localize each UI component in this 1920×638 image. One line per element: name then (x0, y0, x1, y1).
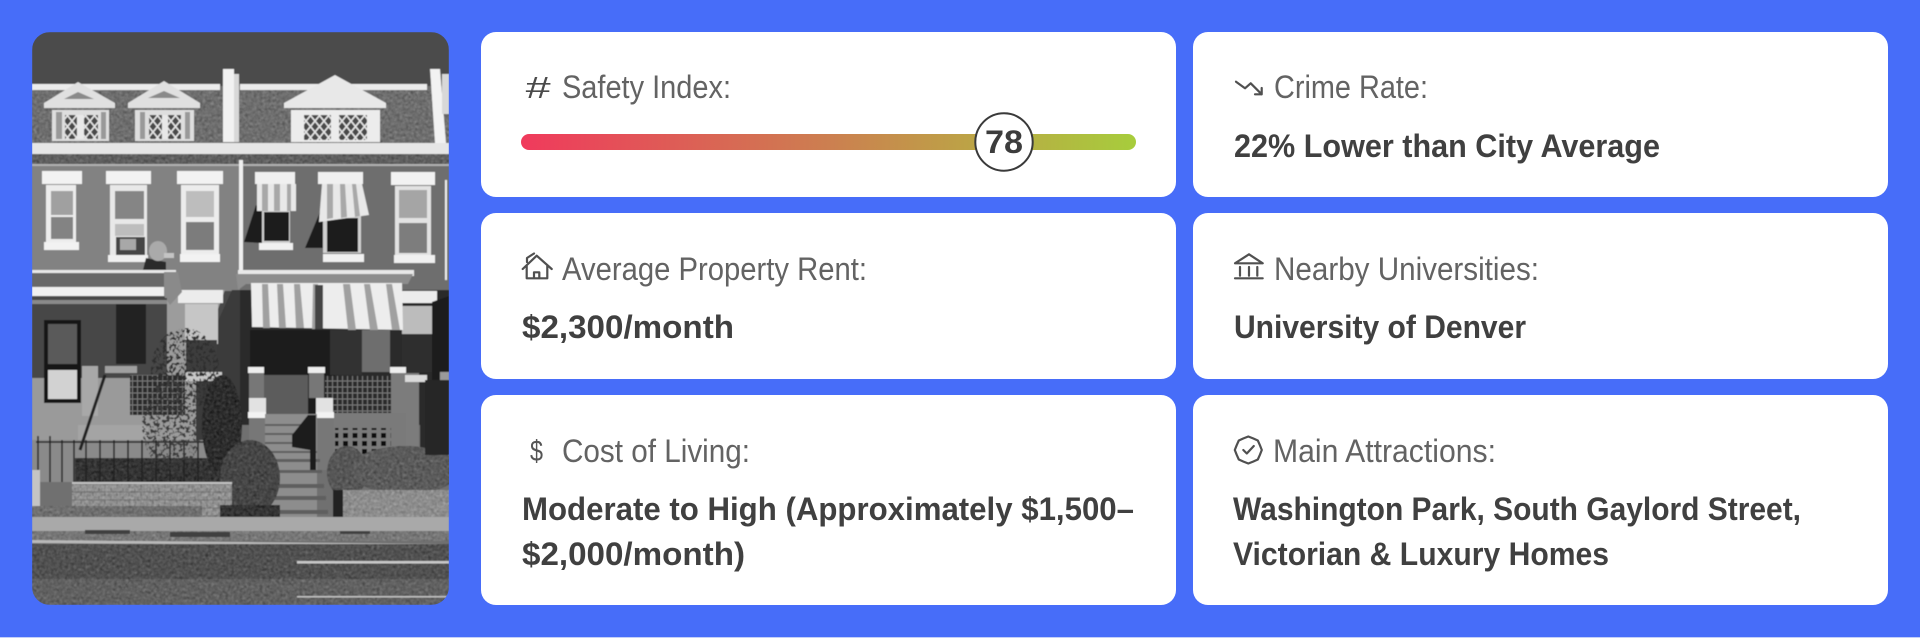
value: main attractions: Victorian & Luxury Homes (1233, 536, 1609, 572)
heading: safety index: Safety Index: (562, 69, 731, 105)
value: crime rate: 22% Lower than City Average (1234, 128, 1660, 164)
upper-floor windows, right house (244, 205, 262, 243)
score marker (975, 113, 1033, 171)
panel: main attractions (1193, 395, 1888, 605)
heading: main attractions: Main Attractions: (1273, 433, 1496, 469)
heading: cost of living: Cost of Living: (562, 433, 750, 469)
value: cost of living (522, 491, 1134, 572)
sidewalk and road (32, 517, 449, 531)
garden, fence and trees (78, 426, 148, 440)
porch railing and pillars (325, 376, 391, 413)
heading: crime rate: Crime Rate: (1274, 69, 1428, 105)
panel: average property rent (481, 213, 1176, 379)
left porch (32, 270, 176, 273)
panel: cost of living (481, 395, 1176, 605)
right porch and awning (238, 270, 414, 276)
icon: house (523, 254, 552, 278)
icon: trending down (1236, 82, 1262, 94)
retaining walls (72, 482, 232, 518)
icon: university building (1235, 254, 1263, 278)
gradient score bar (521, 134, 1136, 150)
icon: hash: # (525, 70, 551, 105)
panel: safety index (481, 32, 1176, 197)
value: university: University of Denver (1234, 309, 1526, 345)
value: cost of living: Moderate to High (Approximately $1,500– (522, 491, 1134, 527)
panel: nearby universities (1193, 213, 1888, 379)
value: main attractions (1233, 491, 1801, 572)
heading: nearby universities: Nearby Universities: (1274, 251, 1539, 287)
ground floor base tones (32, 290, 232, 320)
satellite dish (143, 258, 166, 270)
panel: crime rate (1193, 32, 1888, 197)
heading: average property rent: Average Property Rent: (562, 251, 867, 287)
front steps (265, 414, 317, 520)
icon: dollar: $ (530, 435, 543, 468)
value: rent: $2,300/month (522, 309, 734, 345)
photo: black and white row houses (32, 32, 460, 605)
upper-floor windows, left house (42, 171, 82, 184)
score marker: 78 (985, 124, 1023, 160)
value: cost of living: $2,000/month) (522, 536, 745, 572)
icon: verified badge (1235, 436, 1262, 464)
value: main attractions: Washington Park, South Gaylord Street, (1233, 491, 1801, 527)
